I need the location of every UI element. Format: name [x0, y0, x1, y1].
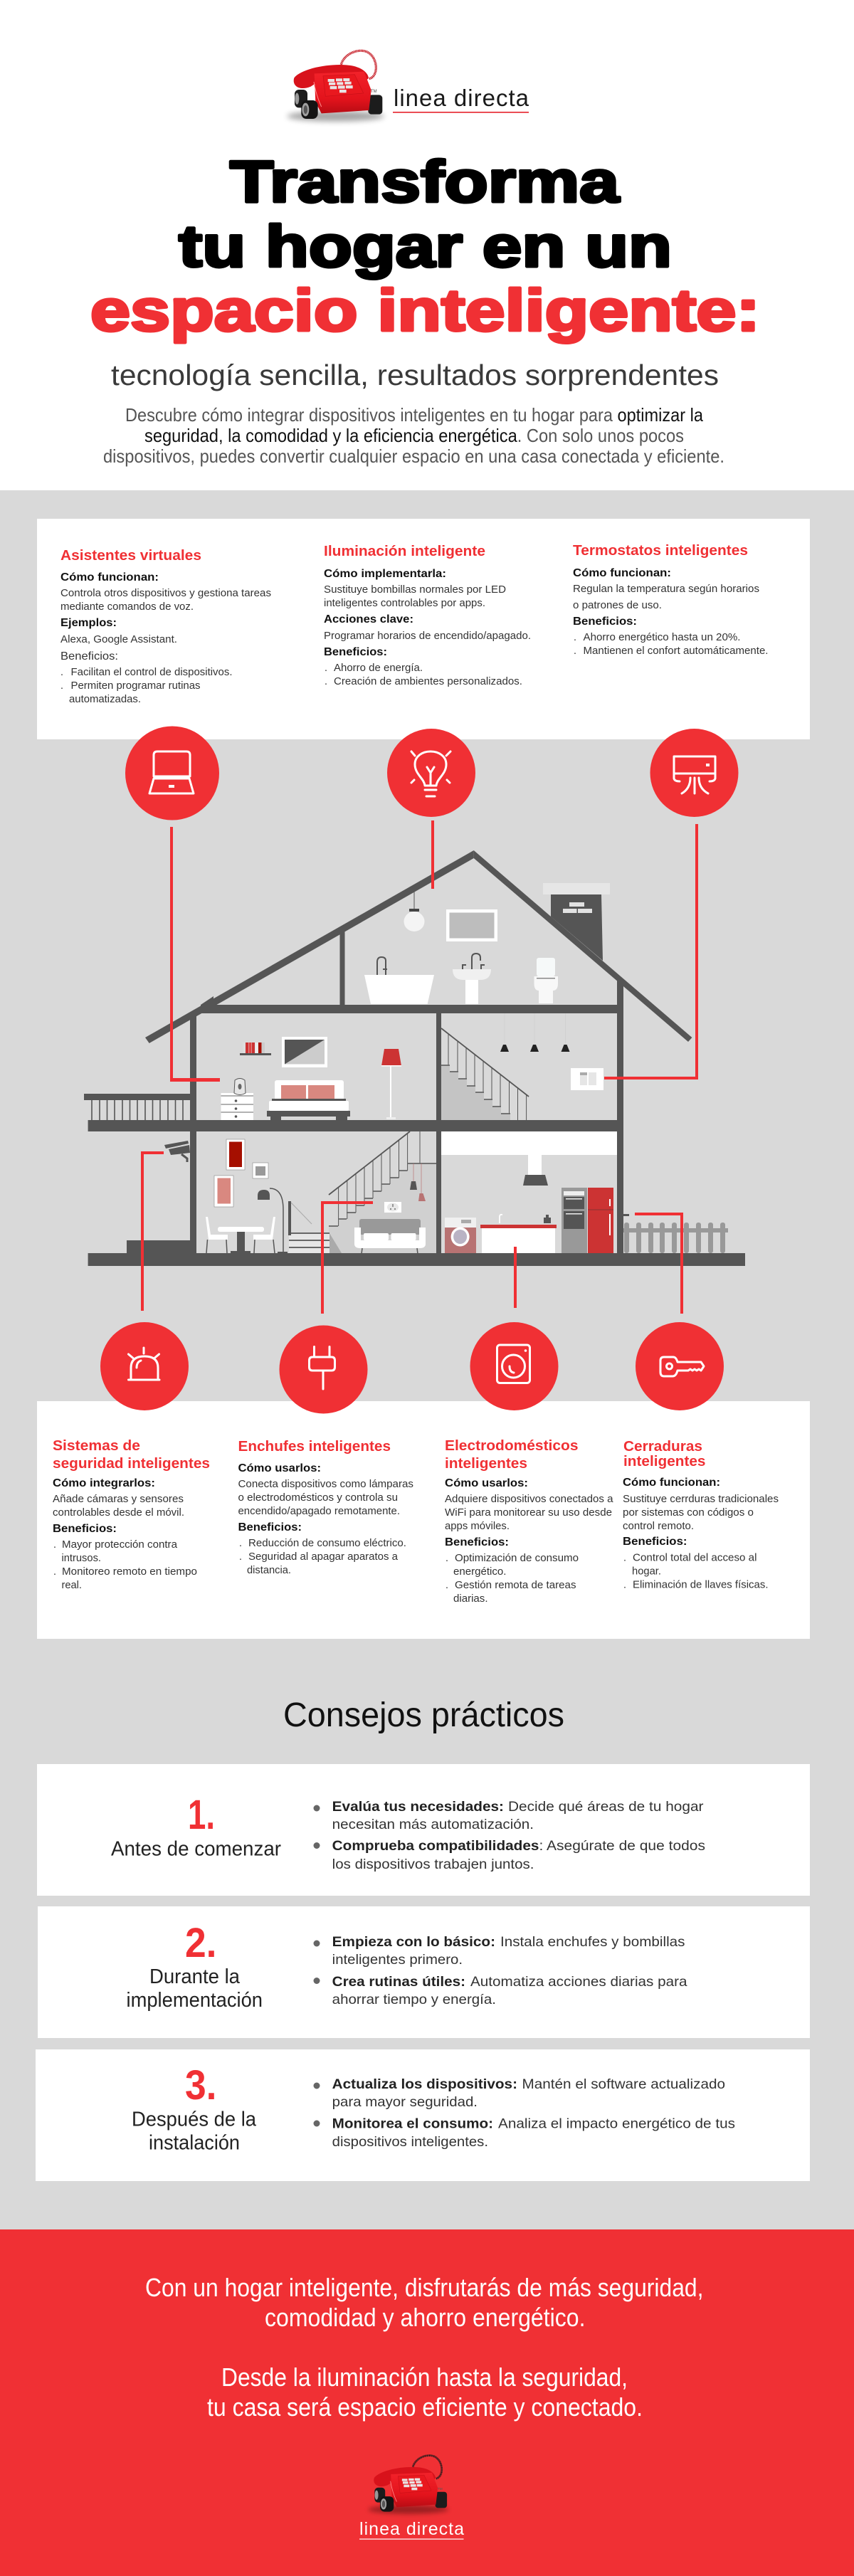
label antes de comenzar: Antes de comenzar: [111, 1837, 281, 1860]
tip list 3: Monitorea el consumo:: [332, 2116, 493, 2132]
column: asistentes virtuales: Cómo funcionan:: [60, 571, 159, 584]
column: electrodomesticos inteligentes: Cómo usarlos:: [445, 1477, 528, 1489]
column: cerraduras inteligentes: control remoto.: [623, 1521, 694, 1532]
tip list 3: [313, 2076, 735, 2150]
column: electrodomesticos inteligentes: .: [446, 1553, 448, 1564]
triangle picture: [282, 1037, 327, 1067]
column: electrodomesticos inteligentes: diarias.: [453, 1593, 488, 1605]
column: electrodomesticos inteligentes: WiFi para monitorear su uso desde: [445, 1507, 612, 1519]
icon: key: [636, 1322, 724, 1410]
number 2: 2.: [185, 1920, 216, 1966]
label durante la implementacion: implementación: [127, 1989, 263, 2012]
icon: washing machine: [470, 1322, 558, 1410]
number 1: 1.: [188, 1792, 215, 1838]
fridge: [588, 1188, 613, 1253]
connector: seguridad: [141, 1151, 164, 1311]
icon: alarm: [100, 1322, 189, 1410]
column: electrodomesticos inteligentes: apps móviles.: [445, 1521, 510, 1532]
column: enchufes inteligentes: .: [239, 1538, 242, 1549]
label durante la implementacion: [127, 1965, 263, 2012]
tip list 1: necesitan más automatización.: [332, 1817, 534, 1832]
column: sistemas de seguridad: Beneficios:: [53, 1523, 117, 1535]
column: iluminacion inteligente: Sustituye bombillas normales por LED: [324, 584, 506, 596]
panel: tip 3: [36, 2049, 810, 2181]
column: asistentes virtuales: .: [60, 680, 63, 692]
tip list 3: Actualiza los dispositivos:: [332, 2076, 517, 2092]
column: enchufes inteligentes: [238, 1439, 413, 1576]
column: termostatos inteligentes: Cómo funcionan:: [573, 567, 671, 579]
column: termostatos inteligentes: Termostatos inteligentes: [573, 543, 748, 559]
column: enchufes inteligentes: Beneficios:: [238, 1521, 302, 1534]
column: sistemas de seguridad: .: [53, 1539, 56, 1551]
mirror: [446, 909, 497, 941]
column: termostatos inteligentes: [573, 543, 769, 657]
connector: electrodomesticos: [514, 1247, 517, 1308]
column: cerraduras inteligentes: .: [623, 1553, 626, 1564]
column: iluminacion inteligente: Acciones clave:: [324, 613, 413, 625]
door handle: [623, 1214, 629, 1216]
connector: cerraduras: [635, 1213, 683, 1314]
garden fence: [623, 1223, 728, 1253]
column: sistemas de seguridad: Mayor protección contra: [62, 1539, 177, 1551]
column: iluminacion inteligente: [324, 544, 531, 687]
column: sistemas de seguridad: intrusos.: [61, 1553, 101, 1564]
virtual assistant device: [234, 1079, 246, 1094]
column: termostatos inteligentes: .: [574, 632, 576, 643]
connector: iluminacion: [431, 820, 434, 889]
nightstand: [221, 1093, 253, 1120]
house illustration: [84, 850, 745, 1266]
column: asistentes virtuales: Permiten programar rutinas: [71, 680, 201, 692]
column: cerraduras inteligentes: inteligentes: [623, 1454, 706, 1469]
closing message: [145, 2273, 703, 2422]
red floor lamp: [381, 1049, 401, 1119]
washing machine: [445, 1218, 476, 1253]
tip list 1: Evalúa tus necesidades:: [332, 1799, 504, 1815]
closing message: comodidad y ahorro energético.: [265, 2303, 585, 2332]
label despues de la instalacion: Después de la: [132, 2108, 257, 2131]
panel: tip 1: [37, 1764, 810, 1896]
column: sistemas de seguridad: real.: [61, 1580, 82, 1591]
tip list 2: Automatiza acciones diarias para: [470, 1974, 687, 1990]
column: asistentes virtuales: Controla otros dispositivos y gestiona tareas: [60, 588, 271, 599]
column: termostatos inteligentes: Ahorro energético hasta un 20%.: [584, 632, 740, 643]
column: electrodomesticos inteligentes: Gestión remota de tareas: [455, 1580, 576, 1591]
column: cerraduras inteligentes: .: [623, 1580, 626, 1591]
column: cerraduras inteligentes: hogar.: [632, 1566, 661, 1577]
intro paragraph: seguridad, la comodidad y la eficiencia energética. Con solo unos pocos: [144, 425, 684, 446]
logo: linea directa: linea directa: [394, 85, 529, 111]
column: asistentes virtuales: [60, 548, 271, 705]
column: enchufes inteligentes: Reducción de consumo eléctrico.: [248, 1538, 406, 1549]
connector: termostatos: [604, 824, 698, 1080]
column: electrodomesticos inteligentes: inteligentes: [445, 1456, 527, 1472]
tip list 3: Analiza el impacto energético de tus: [498, 2116, 735, 2132]
connector: asistentes: [170, 827, 220, 1082]
column: sistemas de seguridad: [53, 1438, 210, 1591]
small entrance stairs: [288, 1201, 342, 1253]
column: cerraduras inteligentes: Beneficios:: [623, 1536, 687, 1548]
column: termostatos inteligentes: o patrones de uso.: [573, 600, 662, 611]
column: enchufes inteligentes: .: [239, 1551, 242, 1563]
icon: plug: [279, 1325, 367, 1413]
tip list 1: [313, 1799, 705, 1872]
footer logo: [359, 2456, 464, 2540]
column: iluminacion inteligente: Ahorro de energía.: [334, 663, 423, 674]
subtitle: tecnología sencilla, resultados sorprendentes: [111, 359, 719, 391]
tip list 3: dispositivos inteligentes.: [332, 2134, 488, 2150]
smart plug outlet: [384, 1202, 401, 1213]
tip list 3: para mayor seguridad.: [332, 2094, 478, 2110]
column: iluminacion inteligente: Creación de ambientes personalizados.: [334, 676, 522, 687]
column: iluminacion inteligente: Beneficios:: [324, 646, 387, 658]
tip list 2: inteligentes primero.: [332, 1952, 463, 1968]
closing message: Desde la iluminación hasta la seguridad,: [221, 2363, 628, 2392]
wall pictures: [214, 1139, 268, 1207]
intro paragraph: dispositivos, puedes convertir cualquier espacio en una casa conectada y eficiente.: [103, 445, 724, 467]
column: sistemas de seguridad: Sistemas de: [53, 1438, 140, 1454]
column: enchufes inteligentes: distancia.: [247, 1565, 291, 1576]
column: electrodomesticos inteligentes: Electrodomésticos: [445, 1438, 578, 1454]
connector lines: [141, 820, 698, 1314]
sink: [453, 954, 491, 1004]
gray content background: [0, 490, 854, 2229]
closing message: tu casa será espacio eficiente y conectado.: [207, 2392, 643, 2422]
heading: consejos practicos: Consejos prácticos: [283, 1696, 564, 1734]
column: enchufes inteligentes: Enchufes inteligentes: [238, 1439, 391, 1455]
column: asistentes virtuales: Beneficios:: [60, 650, 118, 663]
column: iluminacion inteligente: Iluminación inteligente: [324, 544, 485, 559]
kitchen hood: [441, 1131, 617, 1186]
column: cerraduras inteligentes: Cerraduras: [623, 1439, 702, 1455]
column: termostatos inteligentes: .: [574, 645, 576, 657]
column: electrodomesticos inteligentes: Optimización de consumo: [455, 1553, 579, 1564]
label durante la implementacion: Durante la: [149, 1965, 241, 1988]
page background white header: [0, 0, 854, 490]
kitchen counter: [480, 1215, 557, 1253]
intro paragraph: [103, 404, 724, 467]
column: asistentes virtuales: mediante comandos de voz.: [60, 601, 194, 613]
title: espacio inteligente:: [90, 278, 760, 343]
logo: linea directa: [287, 51, 529, 122]
column: cerraduras inteligentes: por sistemas con códigos o: [623, 1507, 754, 1519]
tip list 3: Mantén el software actualizado: [522, 2076, 725, 2092]
bed: [267, 1080, 350, 1120]
label despues de la instalacion: instalación: [149, 2132, 240, 2155]
column: asistentes virtuales: .: [60, 667, 63, 678]
bookshelf: [240, 1042, 271, 1055]
icon: air conditioner: [650, 729, 739, 817]
column: iluminacion inteligente: Cómo implementarla:: [324, 568, 446, 580]
label despues de la instalacion: [132, 2108, 257, 2155]
column: electrodomesticos inteligentes: energético.: [453, 1566, 507, 1578]
column: electrodomesticos inteligentes: [445, 1438, 613, 1605]
tip list 2: Crea rutinas útiles:: [332, 1974, 465, 1990]
column: termostatos inteligentes: Regulan la temperatura según horarios: [573, 584, 759, 595]
title: tu hogar en un: [179, 213, 672, 279]
column: enchufes inteligentes: Cómo usarlos:: [238, 1462, 321, 1474]
tip list 2: [313, 1934, 687, 2007]
tip list 1: : Asegúrate de que todos: [539, 1838, 705, 1854]
column: cerraduras inteligentes: Control total del acceso al: [633, 1553, 757, 1564]
column: asistentes virtuales: Facilitan el control de dispositivos.: [71, 667, 232, 678]
connector: enchufes: [321, 1201, 373, 1314]
upper staircase: [441, 1028, 529, 1120]
column: cerraduras inteligentes: Sustituye cerrduras tradicionales: [623, 1494, 779, 1505]
walls and floors: [88, 930, 745, 1266]
closing message: Con un hogar inteligente, disfrutarás de más seguridad,: [145, 2273, 703, 2302]
column: cerraduras inteligentes: Eliminación de llaves físicas.: [633, 1580, 769, 1591]
roof: [145, 850, 692, 1043]
intro paragraph: Descubre cómo integrar dispositivos inteligentes en tu hogar para optimizar la: [125, 404, 703, 426]
title: [90, 148, 760, 343]
column: iluminacion inteligente: inteligentes controlables por apps.: [324, 598, 485, 609]
column: sistemas de seguridad: Cómo integrarlos:: [53, 1477, 155, 1489]
pendant lamp attic: [404, 892, 424, 931]
panel: top devices: [37, 519, 810, 739]
column: enchufes inteligentes: o electrodomésticos y controla su: [238, 1492, 398, 1504]
column: termostatos inteligentes: Mantienen el confort automáticamente.: [584, 645, 769, 657]
thermostat: [571, 1068, 603, 1090]
panel: tip 2: [38, 1906, 810, 2038]
bathtub: [364, 957, 434, 1004]
arc floor lamp: [258, 1188, 288, 1254]
number 3: 3.: [185, 2062, 216, 2108]
oven tower: [562, 1188, 587, 1253]
column: sistemas de seguridad: .: [53, 1566, 56, 1578]
column: termostatos inteligentes: Beneficios:: [573, 616, 637, 628]
tip list 2: Instala enchufes y bombillas: [500, 1934, 685, 1950]
column: asistentes virtuales: Alexa, Google Assistant.: [60, 634, 177, 645]
tip list 2: Empieza con lo básico:: [332, 1934, 495, 1950]
tip list 2: ahorrar tiempo y energía.: [332, 1992, 496, 2007]
column: sistemas de seguridad: seguridad inteligentes: [53, 1456, 210, 1472]
title: Transforma: [230, 148, 620, 215]
panel: red footer: [0, 2229, 854, 2576]
icon: assistant device: [125, 726, 219, 820]
column: asistentes virtuales: automatizadas.: [69, 694, 141, 705]
column: electrodomesticos inteligentes: .: [446, 1580, 448, 1591]
column: electrodomesticos inteligentes: Beneficios:: [445, 1536, 509, 1548]
column: iluminacion inteligente: Programar horarios de encendido/apagado.: [324, 630, 531, 642]
lower staircase: [329, 1131, 436, 1253]
column: cerraduras inteligentes: [623, 1439, 779, 1591]
toilet: [534, 958, 558, 1003]
balcony railing: [84, 1094, 191, 1120]
column: enchufes inteligentes: Conecta dispositivos como lámparas: [238, 1479, 413, 1490]
icon: light bulb: [387, 729, 475, 817]
column: sistemas de seguridad: Monitoreo remoto en tiempo: [62, 1566, 197, 1578]
column: enchufes inteligentes: Seguridad al apagar aparatos a: [248, 1551, 398, 1563]
column: asistentes virtuales: Asistentes virtuales: [60, 548, 201, 564]
dining table and chairs: [206, 1217, 275, 1253]
column: iluminacion inteligente: .: [325, 676, 327, 687]
column: asistentes virtuales: Ejemplos:: [60, 617, 117, 629]
tip list 1: Decide qué áreas de tu hogar: [508, 1799, 704, 1815]
panel: lower devices: [37, 1401, 810, 1639]
tip list 1: Comprueba compatibilidades: [332, 1838, 539, 1854]
pendant lamps stairwell: [410, 1163, 426, 1201]
sofa: [354, 1219, 426, 1254]
spot lights: [500, 1013, 569, 1052]
column: electrodomesticos inteligentes: Adquiere dispositivos conectados a: [445, 1494, 613, 1505]
column: iluminacion inteligente: .: [325, 663, 327, 674]
security camera: [164, 1141, 190, 1162]
chimney: [543, 883, 610, 961]
footer logo: linea directa: [359, 2519, 464, 2539]
column: cerraduras inteligentes: Cómo funcionan:: [623, 1477, 720, 1489]
column: sistemas de seguridad: controlables desde el móvil.: [53, 1507, 184, 1519]
tip list 1: los dispositivos trabajen juntos.: [332, 1857, 534, 1872]
column: sistemas de seguridad: Añade cámaras y sensores: [53, 1494, 184, 1505]
column: enchufes inteligentes: encendido/apagado remotamente.: [238, 1506, 400, 1517]
